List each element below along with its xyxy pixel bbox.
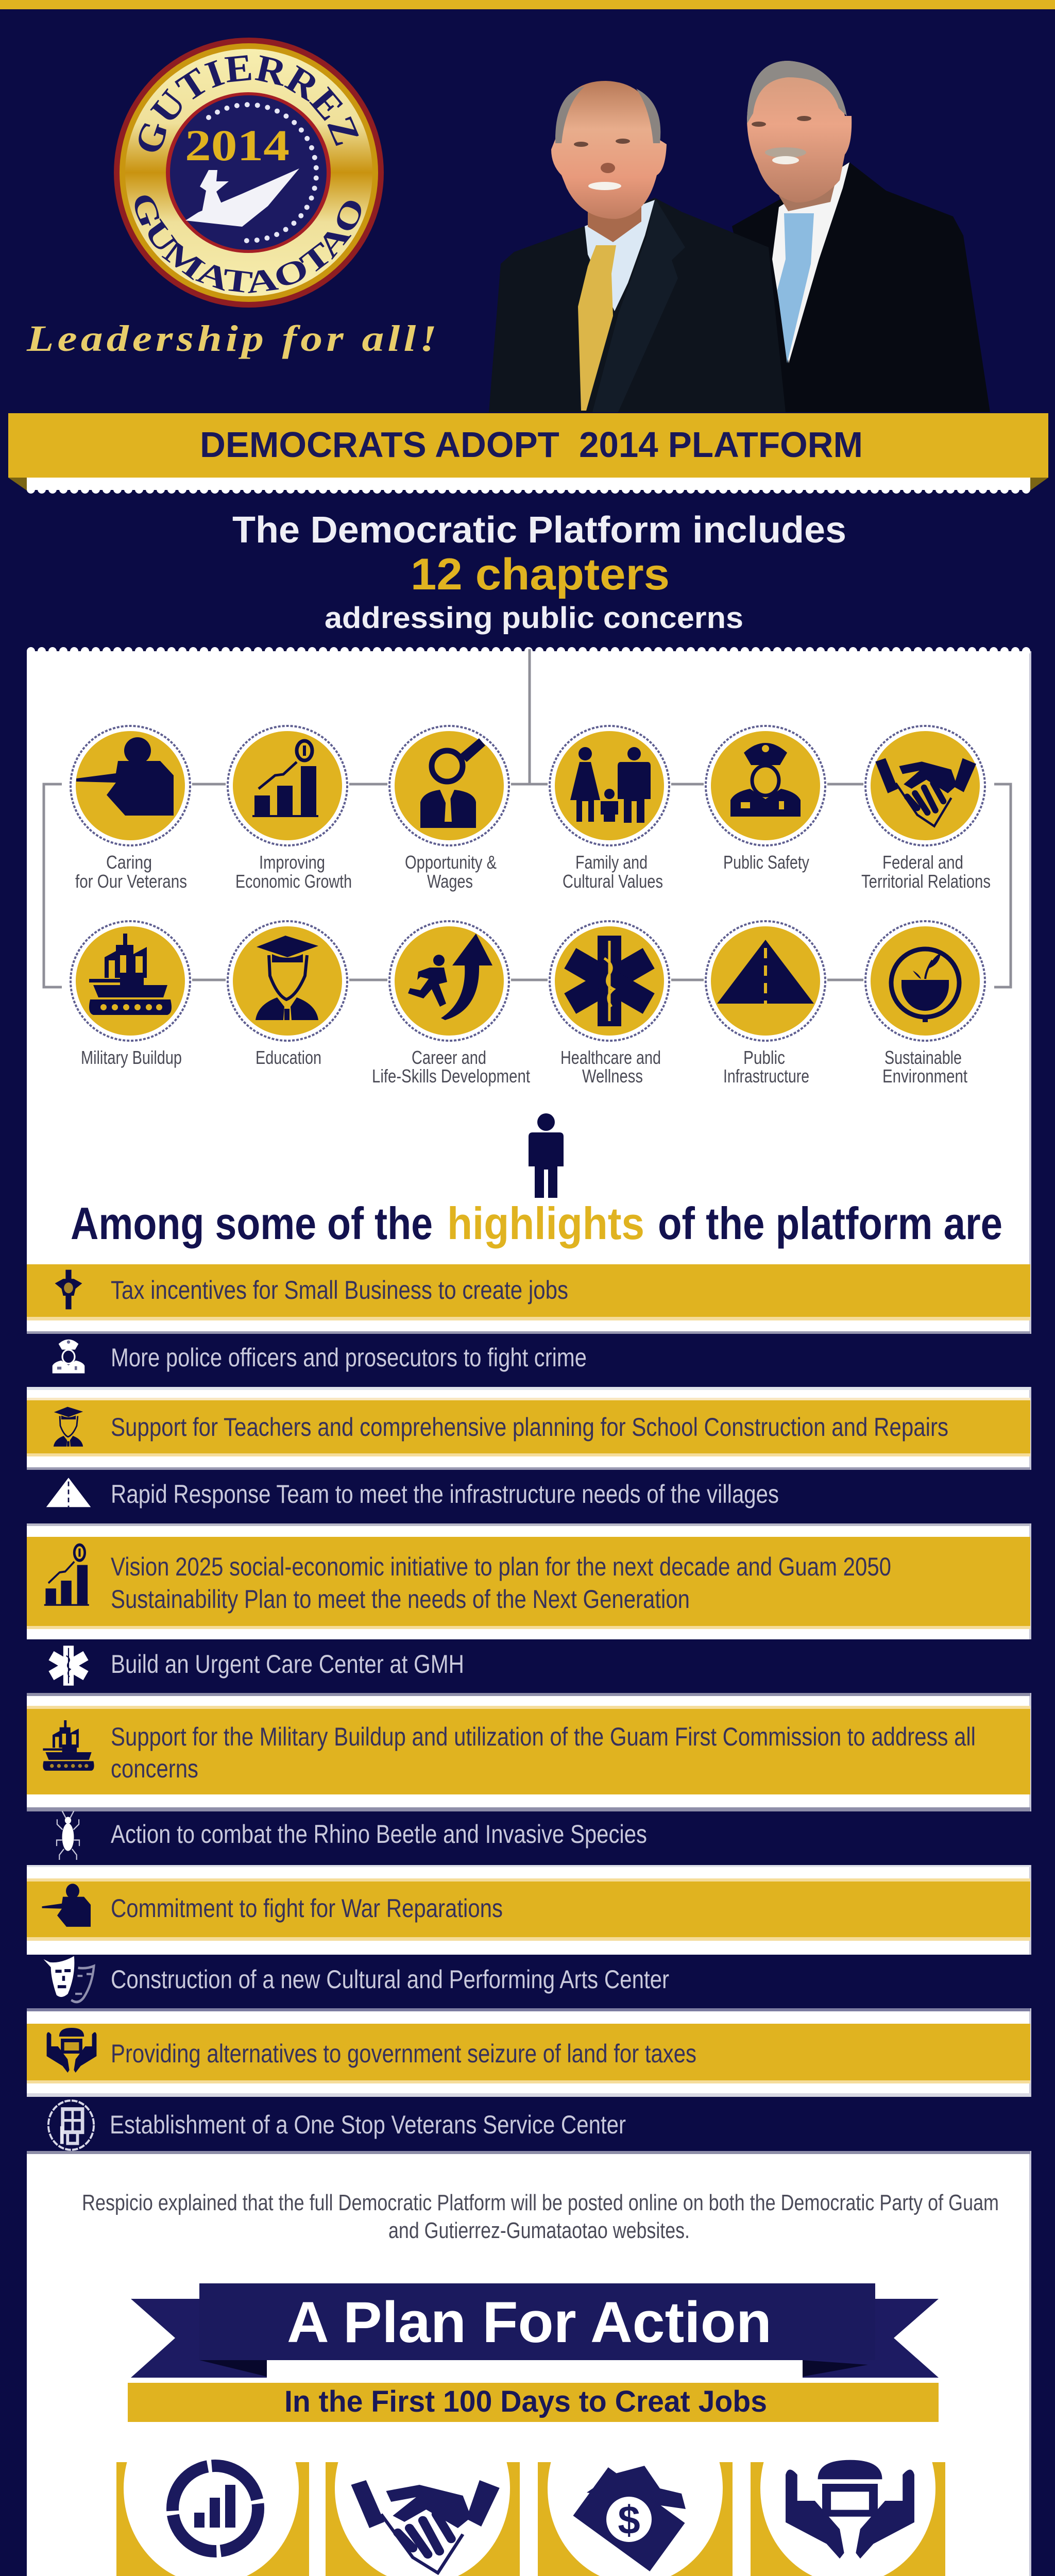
icon: money: [573, 2466, 686, 2571]
icon: donut chart: [173, 2466, 258, 2551]
banner: Democrats adopt 2014 platform: [8, 413, 1048, 490]
chapter: Military Buildup: Military Buildup: [81, 1047, 182, 1068]
top gold strip: [0, 0, 1055, 9]
chapter: Education: Education: [256, 1047, 321, 1068]
chapter: Opportunity & Wages: [387, 724, 511, 892]
chapter: Healthcare and Wellness: Wellness: [582, 1065, 643, 1087]
chapter: Federal and Territorial Relations: Territorial Relations: [861, 871, 991, 892]
highlight: tax incentives: Tax incentives for Small Business to create jobs: [111, 1276, 568, 1304]
chapter: Public Infrastructure: [704, 919, 827, 1087]
icon: money: $: [618, 2497, 640, 2543]
chapter: Family and Cultural Values: [548, 724, 671, 892]
chapter: Military Buildup: [69, 919, 192, 1068]
highlight: urgent care: [0, 1639, 1055, 1693]
chapter: Public Infrastructure: Public: [743, 1047, 785, 1068]
chapter: Improving Economic Growth: Economic Growth: [235, 871, 352, 892]
highlight: rapid response: [0, 1470, 1055, 1523]
chapter: Caring for Our Veterans: Caring: [106, 852, 152, 873]
plan card: Rebuild: [326, 2462, 520, 2576]
heading: highlights: Among some of the: [71, 1198, 433, 1249]
ribbon: A Plan For Action: [131, 2283, 939, 2378]
chapter: Public Infrastructure: Infrastructure: [723, 1065, 809, 1087]
tagline: Leadership for all!: [26, 318, 440, 359]
highlight: rapid response: Rapid Response Team to meet the infrastructure needs of the villages: [111, 1480, 779, 1509]
icon: handshake: [351, 2480, 500, 2573]
right man: [732, 61, 990, 412]
chapter: Opportunity & Wages: Wages: [427, 871, 473, 892]
logo: Gutierrez Gumataotao 2014 seal: 2014: [185, 121, 290, 170]
highlight: rhino beetle: [0, 1811, 1055, 1865]
highlight: land seizure: Providing alternatives to government seizure of land for taxes: [111, 2039, 696, 2068]
logo: Gutierrez Gumataotao 2014 seal: GUTIERREZ: [139, 55, 359, 151]
chapter: Family and Cultural Values: Family and: [575, 852, 648, 873]
chapter: Federal and Territorial Relations: [861, 724, 991, 892]
highlight: military buildup: concerns: [111, 1754, 198, 1783]
highlight: cultural center: [0, 1955, 1055, 2008]
plan card: Invest: [538, 2462, 733, 2576]
subtitle bar: [128, 2383, 939, 2422]
chapter: Opportunity & Wages: Opportunity &: [405, 852, 497, 873]
highlight: war reparations: Commitment to fight for War Reparations: [111, 1894, 503, 1923]
paragraph: Respicio statement: [82, 2190, 999, 2243]
chapter: Education: [226, 919, 349, 1068]
chapter: Improving Economic Growth: [226, 724, 352, 892]
chapter: Public Safety: Public Safety: [723, 852, 809, 873]
highlight: vision 2025: [27, 1523, 1030, 1629]
highlight: tax incentives: [27, 1264, 1030, 1334]
highlight: veterans center: [0, 2097, 1055, 2154]
heading: highlights: of the platform are: [658, 1198, 1002, 1249]
white main panel: [27, 651, 1031, 2576]
chapter: Sustainable Environment: Sustainable: [884, 1047, 962, 1068]
logo: Gutierrez Gumataotao 2014 seal: GUMATAOTAO: [135, 195, 361, 293]
subtitle bar: In the First 100 Days to Creat Jobs: [284, 2385, 767, 2418]
chapter: Caring for Our Veterans: [69, 724, 192, 892]
chapter: Public Safety: [704, 724, 827, 873]
chapter: Career and Life-Skills Development: [372, 919, 530, 1087]
heading: highlights: highlights: [447, 1198, 644, 1249]
highlight: teachers: [27, 1387, 1030, 1470]
highlight: military buildup: [27, 1693, 1030, 1811]
chapter: Career and Life-Skills Development: Life-Skills Development: [372, 1065, 530, 1087]
chapter: Sustainable Environment: [863, 919, 987, 1087]
heading: 12 chapters: The Democratic Platform includes: [232, 510, 846, 551]
chapter: Healthcare and Wellness: Healthcare and: [560, 1047, 661, 1068]
chapter: Federal and Territorial Relations: Federal and: [882, 852, 963, 873]
highlight: war reparations: [27, 1865, 1030, 1941]
chapter icons: [69, 724, 991, 1087]
highlight: vision 2025: Sustainability Plan to meet the needs of the Next Generation: [111, 1585, 690, 1614]
left man: [489, 81, 786, 412]
heading: 12 chapters: [232, 510, 846, 635]
chapter: Family and Cultural Values: Cultural Values: [563, 871, 663, 892]
highlight: cultural center: Construction of a new Cultural and Performing Arts Center: [111, 1965, 669, 1994]
plan card: Reform: [116, 2460, 309, 2576]
ribbon: A Plan For Action: A Plan For Action: [287, 2290, 772, 2354]
highlight: urgent care: Build an Urgent Care Center at GMH: [111, 1650, 464, 1679]
banner: Democrats adopt 2014 platform: DEMOCRATS ADOPT 2014 PLATFORM: [200, 425, 863, 465]
plan card: Relief: [751, 2460, 945, 2576]
highlight: vision 2025: Vision 2025 social-economic initiative to plan for the next decade and Guam 2050: [111, 1552, 891, 1581]
highlight: land seizure: [27, 2008, 1030, 2097]
photo: two candidates: [489, 61, 990, 412]
highlight: police: [0, 1334, 1055, 1387]
heading: 12 chapters: addressing public concerns: [325, 601, 743, 635]
chapter: Caring for Our Veterans: for Our Veterans: [75, 871, 187, 892]
highlight: veterans center: Establishment of a One Stop Veterans Service Center: [110, 2110, 626, 2139]
chapter: Healthcare and Wellness: [548, 919, 671, 1087]
highlight: police: More police officers and prosecutors to fight crime: [111, 1343, 587, 1372]
heading: highlights: [71, 1198, 1002, 1249]
paragraph: Respicio statement: and Gutierrez-Gumataotao websites.: [388, 2218, 690, 2243]
chapter: Improving Economic Growth: Improving: [259, 852, 325, 873]
icon: person: [529, 1113, 564, 1198]
heading: 12 chapters: 12 chapters: [411, 550, 670, 599]
chapter: Career and Life-Skills Development: Career and: [412, 1047, 486, 1068]
highlight: rhino beetle: Action to combat the Rhino Beetle and Invasive Species: [111, 1820, 647, 1849]
icon: hands holding shop: [786, 2460, 914, 2558]
chapter: Sustainable Environment: Environment: [882, 1065, 967, 1087]
connector lines: [44, 649, 1011, 987]
logo: Gutierrez Gumataotao 2014 seal: [114, 38, 384, 308]
